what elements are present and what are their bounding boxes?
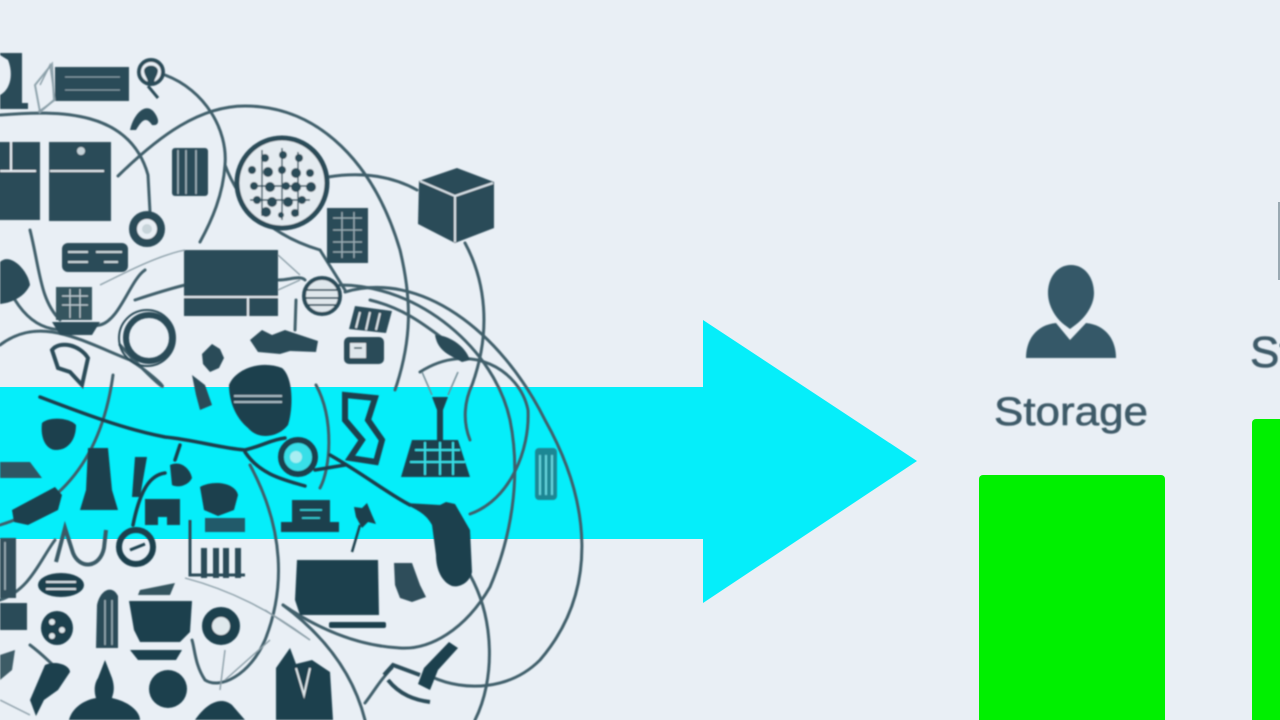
- icon: tall bottle: [96, 590, 118, 648]
- icon: person figure: [69, 660, 140, 720]
- label: Storage: Storage: [994, 390, 1148, 434]
- icon: banner panel: [35, 64, 129, 112]
- icon: dark capsule: [435, 335, 470, 362]
- icon: calculator laptop: [52, 287, 100, 335]
- icon: monitor top left: [0, 53, 28, 109]
- icon: left blob: [0, 259, 30, 304]
- icon: bottom blob: [195, 701, 245, 720]
- arrow: cyan pointing right: [0, 320, 917, 603]
- tangled network of device icons: [0, 53, 582, 720]
- icon: round coin: [149, 670, 187, 708]
- icon: plug tool: [384, 642, 458, 702]
- icon: tall bar: [132, 457, 147, 497]
- icon: light bulb: [139, 60, 163, 98]
- icon: curled band device: [12, 487, 62, 525]
- icon: big laptop: [184, 250, 278, 316]
- icon: clipped second icon: [1278, 202, 1280, 280]
- icon: slim device: [535, 448, 557, 500]
- icon: left lower box: [0, 603, 27, 630]
- icon group: band and lower devices: [0, 365, 557, 720]
- icon: large ring: [119, 310, 175, 366]
- icon: binder mug: [172, 148, 208, 196]
- icon: striped ring: [304, 278, 340, 314]
- icon: lower laptop: [295, 560, 386, 628]
- icon: cube: [418, 168, 494, 243]
- icon: arch U: [56, 528, 106, 564]
- icon: small tablet: [327, 208, 368, 263]
- icon: small bottom left mark: [0, 650, 15, 680]
- icon: oval radio: [38, 573, 84, 597]
- icon: brain chip: [229, 365, 292, 436]
- icon: hat: [281, 500, 339, 532]
- icon: patterned figure: [345, 395, 382, 462]
- icon: radio device: [62, 243, 128, 272]
- icon: small flower: [202, 344, 224, 372]
- icon: small blob node: [170, 463, 192, 486]
- icon: controller arch: [130, 108, 158, 130]
- icon: gadget cluster: [250, 330, 318, 354]
- icon: left figure: [30, 663, 70, 716]
- icon: donut: [207, 612, 235, 640]
- icon: ring badge: [281, 440, 315, 474]
- icon: socket box: [344, 337, 384, 364]
- bar: green storage: [979, 475, 1165, 720]
- icon: small top figure cluster: [52, 345, 88, 385]
- icon: map block: [394, 563, 426, 602]
- icon: dark phone silhouette: [405, 502, 472, 586]
- connecting curves: [0, 75, 582, 720]
- icon: tall block: [80, 448, 118, 510]
- icon: left tall block: [0, 538, 16, 598]
- icon: left screen panel: [0, 142, 40, 220]
- icon: small blob: [42, 419, 76, 450]
- icon: small ring: [133, 215, 161, 243]
- icon: house block: [145, 499, 180, 525]
- icon: flower donut: [41, 611, 73, 645]
- bar: green second: [1252, 419, 1280, 720]
- icon group: upper devices: [0, 53, 494, 410]
- icon: right screen panel: [49, 142, 111, 221]
- icon: leftover figure: [192, 375, 212, 410]
- icon: lower mug laptop: [129, 583, 192, 660]
- icon: suit: [276, 648, 333, 720]
- icon: person: [1026, 265, 1116, 358]
- column: clipped second: [1250, 202, 1280, 720]
- icon: ring lower: [119, 530, 153, 564]
- icon: lamp on tablet: [401, 372, 470, 477]
- icon: patterned globe: [237, 138, 327, 228]
- icon: robot figure: [190, 483, 245, 578]
- dark connecting lines across band: [40, 397, 410, 525]
- faint wiring: [0, 65, 310, 715]
- column: storage: [979, 265, 1165, 720]
- icon: star: [352, 503, 376, 552]
- icon: keypad: [349, 306, 392, 333]
- icon: left text row: [0, 462, 42, 478]
